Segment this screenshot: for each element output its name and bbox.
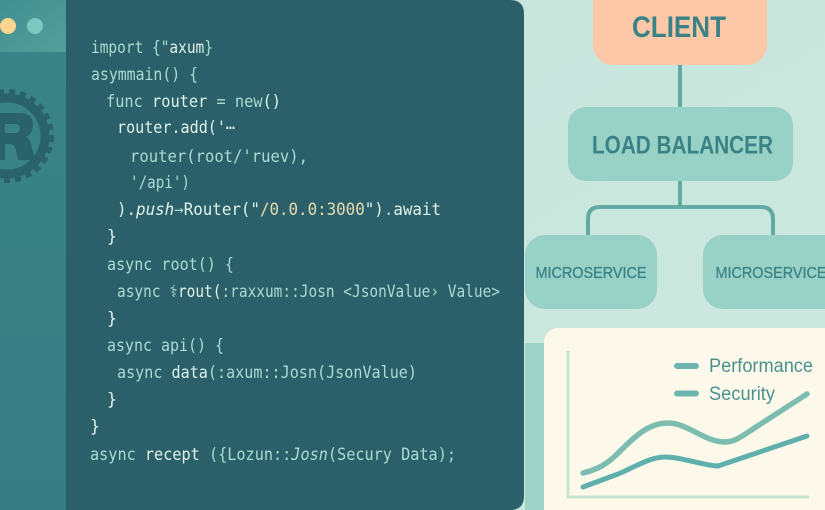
microservice box left — [525, 235, 657, 309]
code listing: func router = new() — [106, 92, 281, 111]
load balancer box: LOAD BALANCER — [592, 132, 773, 160]
code listing: '/api') — [130, 173, 190, 192]
client box — [593, 0, 767, 65]
code listing: async data(:axum::Josn(JsonValue) — [117, 363, 417, 382]
code listing: async recept ({Lozun::Josn(Secury Data); — [90, 445, 456, 464]
code listing: async root() { — [107, 255, 234, 274]
panel: editor sidebar — [0, 0, 70, 510]
load balancer box — [568, 107, 793, 181]
code listing: } — [107, 227, 117, 246]
icon: rust gear logo — [0, 92, 51, 180]
code listing: asymmain() { — [91, 65, 198, 84]
code listing: async api() { — [107, 336, 224, 355]
code listing: } — [90, 417, 100, 436]
code listing: } — [107, 390, 117, 409]
microservice box right — [703, 235, 825, 309]
code listing: import {"axum} — [91, 38, 213, 57]
legend: Performance — [709, 356, 813, 377]
panel: code editor — [66, 0, 524, 510]
legend: Security — [709, 384, 775, 405]
panel: line chart — [544, 328, 825, 510]
code listing — [90, 38, 500, 464]
line: performance — [583, 394, 807, 473]
client box: CLIENT — [632, 11, 726, 44]
legend — [677, 356, 813, 405]
code listing: ).push→Router("/0.0.0:3000").await — [117, 200, 441, 219]
line: security — [583, 436, 807, 487]
connector lines — [588, 65, 773, 235]
panel: backing card — [525, 343, 555, 510]
code listing: router(root/'ruev), — [130, 147, 308, 166]
chart axes — [568, 351, 809, 497]
code listing: router.add('⋯ — [117, 118, 235, 137]
microservice box left: MICROSERVICE — [536, 265, 646, 282]
code listing: } — [107, 309, 117, 328]
code listing: async ⚕rout(:raxxum::Josn <JsonValue› Value> — [117, 282, 500, 301]
